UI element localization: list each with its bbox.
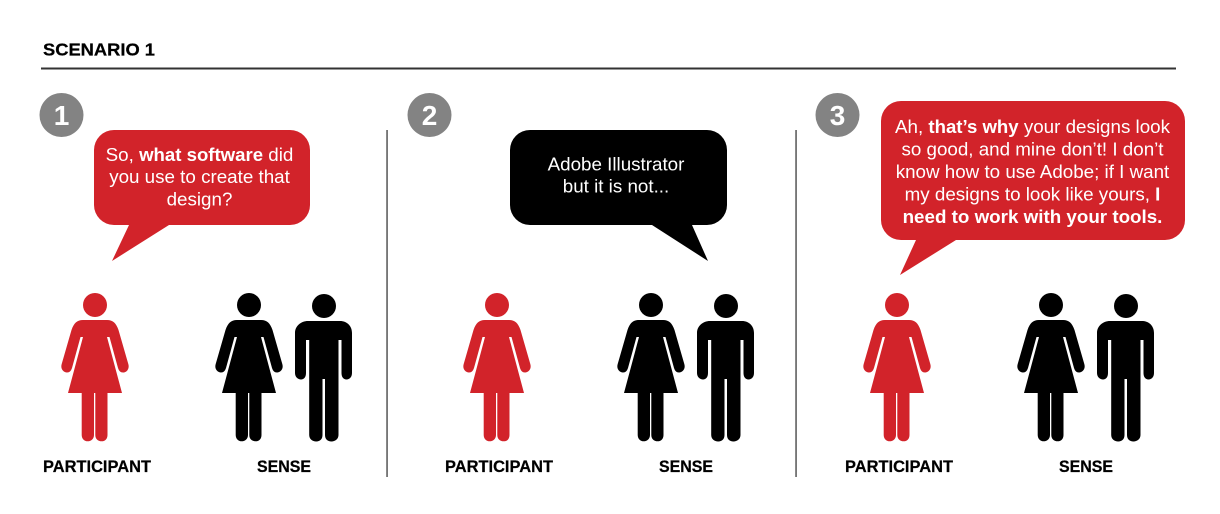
speech bubble: participant conclusion: so good, and mine don’t! I don’t	[901, 138, 1164, 160]
label: sense: SENSE	[257, 458, 311, 476]
speech bubble: participant conclusion: know how to use Adobe; if I want	[896, 161, 1170, 182]
icon: participant woman	[463, 293, 531, 441]
speech bubble: participant question: design?	[167, 188, 232, 210]
speech bubble: participant question: you use to create that	[109, 166, 291, 187]
speech bubble: participant question: So, what software did	[106, 144, 293, 165]
step number 2: 2	[422, 100, 437, 131]
label: participant: PARTICIPANT	[43, 458, 151, 476]
speech bubble: participant question	[94, 130, 310, 261]
label: participant: PARTICIPANT	[845, 458, 953, 476]
speech bubble: sense reply	[510, 130, 727, 261]
icon: sense man	[697, 294, 754, 442]
step number 1	[40, 93, 84, 137]
icon: sense woman	[617, 293, 685, 441]
speech bubble: participant conclusion	[881, 101, 1185, 275]
panel: step 1	[40, 93, 352, 476]
panel: step 2	[408, 93, 754, 476]
label: sense: SENSE	[659, 458, 713, 476]
speech bubble: sense reply: but it is not...	[563, 176, 669, 196]
step number 3: 3	[830, 100, 845, 131]
speech bubble: participant conclusion: my designs to look like yours, I	[905, 184, 1160, 204]
label: sense: SENSE	[1059, 458, 1113, 476]
title: SCENARIO 1	[43, 40, 155, 60]
icon: sense man	[1097, 294, 1154, 442]
icon: sense woman	[215, 293, 283, 441]
panel: step 3	[816, 93, 1185, 476]
speech bubble: sense reply: Adobe Illustrator	[548, 154, 684, 174]
step number 2	[408, 93, 452, 137]
icon: participant woman	[863, 293, 931, 441]
icon: sense woman	[1017, 293, 1085, 441]
step number 1: 1	[54, 100, 69, 131]
label: participant: PARTICIPANT	[445, 458, 553, 476]
icon: sense man	[295, 294, 352, 442]
step number 3	[816, 93, 860, 137]
speech bubble: participant conclusion: need to work with your tools.	[903, 206, 1162, 227]
icon: participant woman	[61, 293, 129, 441]
speech bubble: participant conclusion: Ah, that’s why your designs look	[895, 116, 1171, 137]
